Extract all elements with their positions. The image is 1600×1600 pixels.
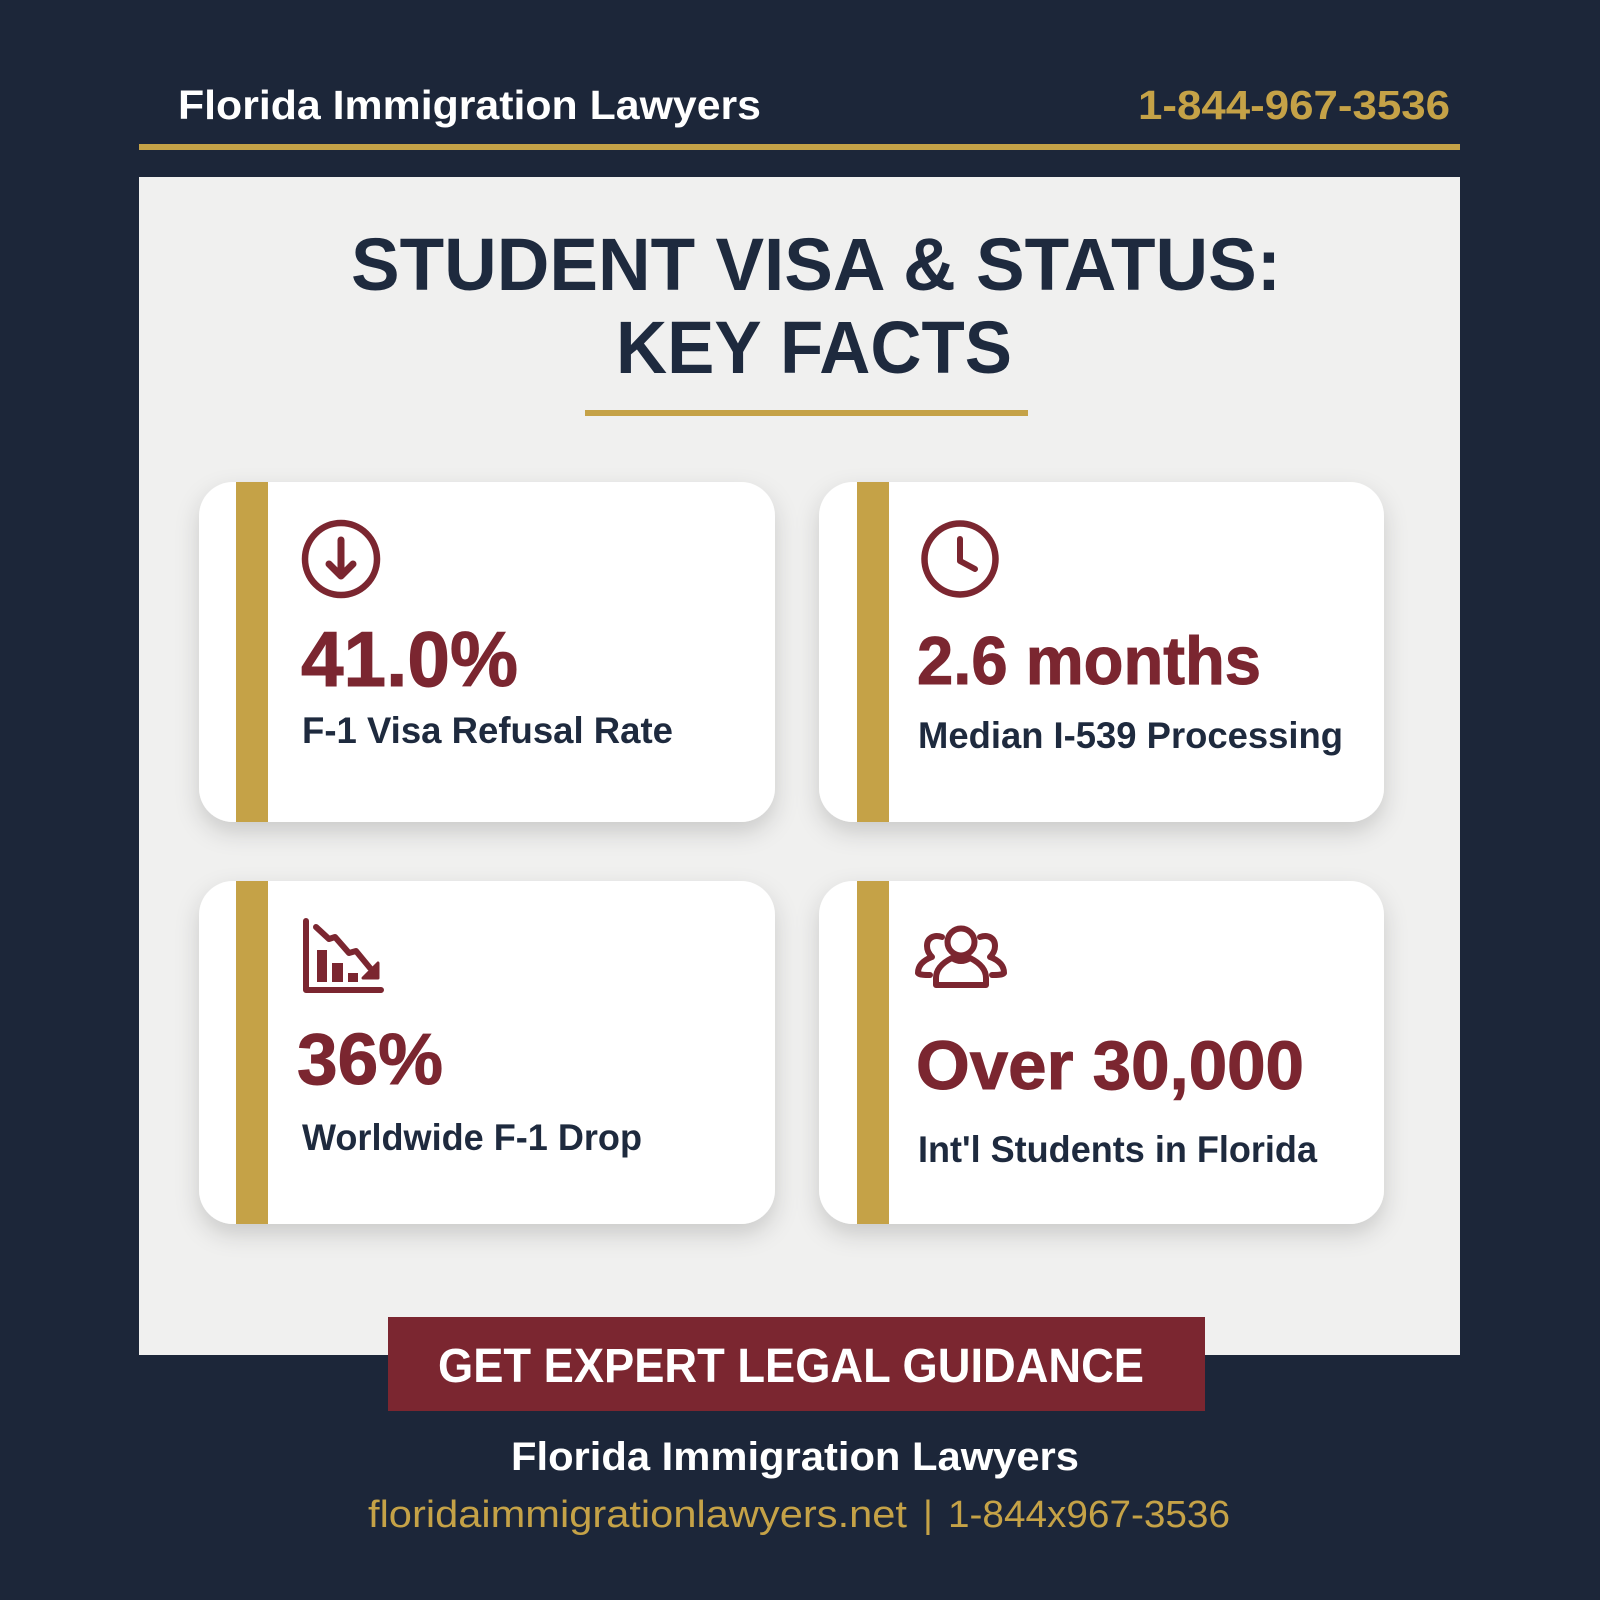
footer website and phone: floridaimmigrationlawyers.net bbox=[368, 1494, 907, 1536]
card: median I-539 processing bbox=[819, 482, 1384, 822]
label: Median I-539 Processing: Median I-539 Processing bbox=[918, 715, 1343, 756]
footer website and phone bbox=[368, 1494, 1230, 1536]
card: F-1 visa refusal rate bbox=[199, 482, 775, 822]
label: Int'l Students in Florida: Int'l Students in Florida bbox=[918, 1129, 1317, 1170]
title: STUDENT VISA & STATUS: bbox=[351, 223, 1281, 306]
icon: clock bbox=[924, 524, 996, 594]
icon: declining bar chart bbox=[306, 921, 381, 990]
stat: 36%: 36% bbox=[297, 1020, 443, 1100]
icon: group of people bbox=[918, 928, 1004, 985]
main panel bbox=[139, 177, 1460, 1355]
header firm name: Florida Immigration Lawyers bbox=[178, 82, 761, 128]
stat: 41.0%: 41.0% bbox=[301, 615, 518, 703]
title: KEY FACTS bbox=[616, 306, 1012, 389]
card: worldwide F-1 drop bbox=[199, 881, 775, 1224]
footer website and phone: 1-844x967-3536 bbox=[948, 1494, 1230, 1536]
call to action banner bbox=[388, 1317, 1205, 1411]
label: F-1 Visa Refusal Rate: F-1 Visa Refusal Rate bbox=[302, 710, 673, 751]
icon: down arrow in circle bbox=[305, 523, 377, 595]
header bar bbox=[139, 82, 1460, 150]
call to action banner: GET EXPERT LEGAL GUIDANCE bbox=[438, 1340, 1144, 1393]
label: Worldwide F-1 Drop: Worldwide F-1 Drop bbox=[302, 1117, 642, 1158]
stat: 2.6 months: 2.6 months bbox=[917, 623, 1261, 699]
header phone number: 1-844-967-3536 bbox=[1138, 82, 1450, 128]
title bbox=[351, 223, 1281, 416]
card: international students in Florida bbox=[819, 881, 1384, 1224]
stat: Over 30,000: Over 30,000 bbox=[916, 1027, 1304, 1104]
footer firm name: Florida Immigration Lawyers bbox=[511, 1435, 1079, 1479]
footer website and phone: | bbox=[923, 1494, 933, 1536]
